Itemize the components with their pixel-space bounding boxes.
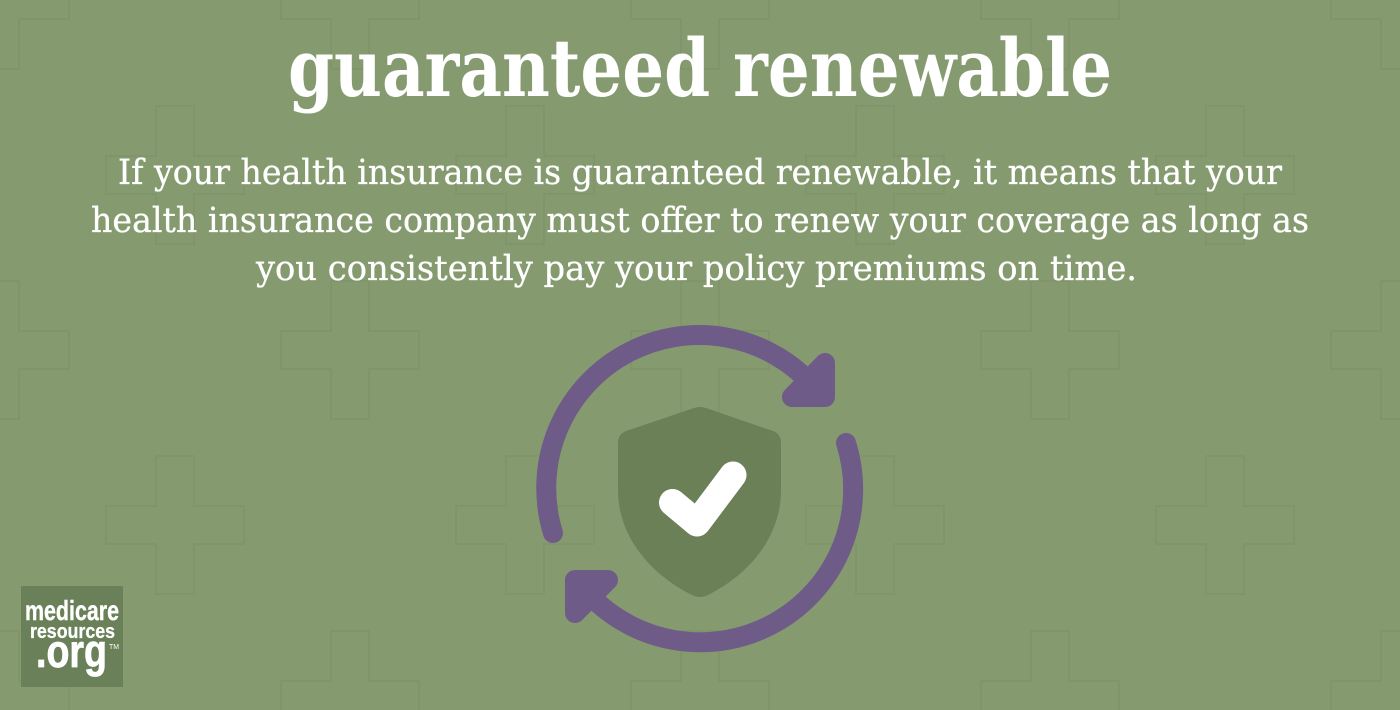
description text: [91, 153, 1309, 289]
arrow: lower clockwise arc: [575, 443, 853, 642]
title: guaranteed renewable: [288, 21, 1112, 115]
description text: If your health insurance is guaranteed renewable, it means that your: [118, 153, 1282, 193]
logo: medicareresources.org: .org: [36, 625, 107, 677]
description text: health insurance company must offer to renew your coverage as long as: [91, 201, 1309, 241]
description text: you consistently pay your policy premiums on time.: [255, 249, 1137, 289]
logo: medicareresources.org: resources: [30, 621, 115, 643]
icon: renewal arrows around shield: [546, 335, 853, 642]
icon: shield: [618, 407, 781, 597]
icon: check mark: [672, 475, 733, 523]
logo: medicareresources.org: [21, 586, 123, 687]
arrow: upper clockwise arc: [546, 335, 825, 533]
logo: medicareresources.org: TM: [109, 644, 119, 651]
logo: medicareresources.org: medicare: [25, 595, 119, 626]
